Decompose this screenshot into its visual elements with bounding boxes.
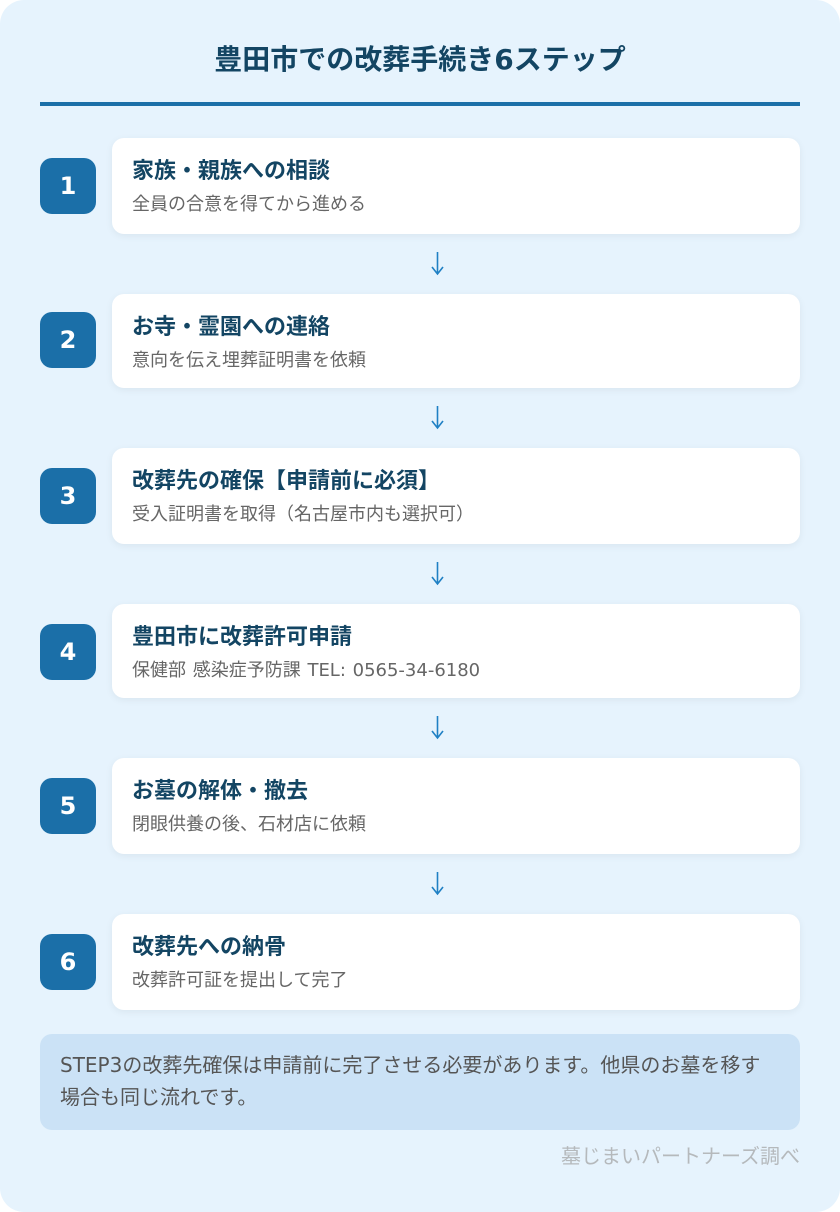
step 5 card — [112, 758, 800, 854]
step 4 heading: 豊田市に改葬許可申請 — [132, 625, 352, 650]
note callout — [40, 1034, 800, 1130]
title: 豊田市での改葬手続き6ステップ — [214, 43, 626, 76]
step 6 heading: 改葬先への納骨 — [132, 935, 286, 960]
arrow 5 to 6 — [432, 872, 444, 896]
arrow 4 to 5 — [432, 716, 444, 740]
step 2 number badge — [40, 312, 96, 368]
step 4 number badge — [40, 624, 96, 680]
step 5 number badge — [40, 778, 96, 834]
step 6 card — [112, 914, 800, 1010]
note callout: STEP3の改葬先確保は申請前に完了させる必要があります。他県のお墓を移す場合も同じ流れです。 — [60, 1053, 760, 1109]
step 2 description: 意向を伝え埋葬証明書を依頼 — [132, 350, 366, 371]
step 1 heading: 家族・親族への相談 — [132, 159, 330, 184]
step 3 heading: 改葬先の確保【申請前に必須】 — [132, 469, 440, 494]
step 6 number badge — [40, 934, 96, 990]
step 2 number badge: 2 — [60, 326, 76, 354]
step 6 description: 改葬許可証を提出して完了 — [132, 970, 347, 991]
step 1 card — [112, 138, 800, 234]
step 6 number badge: 6 — [60, 948, 76, 976]
step 1 number badge: 1 — [60, 172, 76, 200]
step 4 number badge: 4 — [60, 638, 76, 666]
step 3 number badge: 3 — [60, 482, 76, 510]
source credit: 墓じまいパートナーズ調べ — [561, 1144, 800, 1168]
step 3 description: 受入証明書を取得（名古屋市内も選択可） — [132, 504, 474, 525]
step 1 description: 全員の合意を得てから進める — [132, 194, 366, 215]
arrow 2 to 3 — [432, 406, 444, 430]
step 4 card — [112, 604, 800, 698]
step 3 number badge — [40, 468, 96, 524]
step 2 card — [112, 294, 800, 388]
step 5 number badge: 5 — [60, 792, 76, 820]
step 3 card — [112, 448, 800, 544]
arrow 3 to 4 — [432, 562, 444, 586]
step 5 heading: お墓の解体・撤去 — [132, 779, 308, 804]
arrow 1 to 2 — [432, 252, 444, 276]
step 2 heading: お寺・霊園への連絡 — [132, 315, 330, 340]
step 4 description: 保健部 感染症予防課 TEL: 0565-34-6180 — [132, 660, 480, 681]
step 5 description: 閉眼供養の後、石材店に依頼 — [132, 814, 366, 835]
step 1 number badge — [40, 158, 96, 214]
